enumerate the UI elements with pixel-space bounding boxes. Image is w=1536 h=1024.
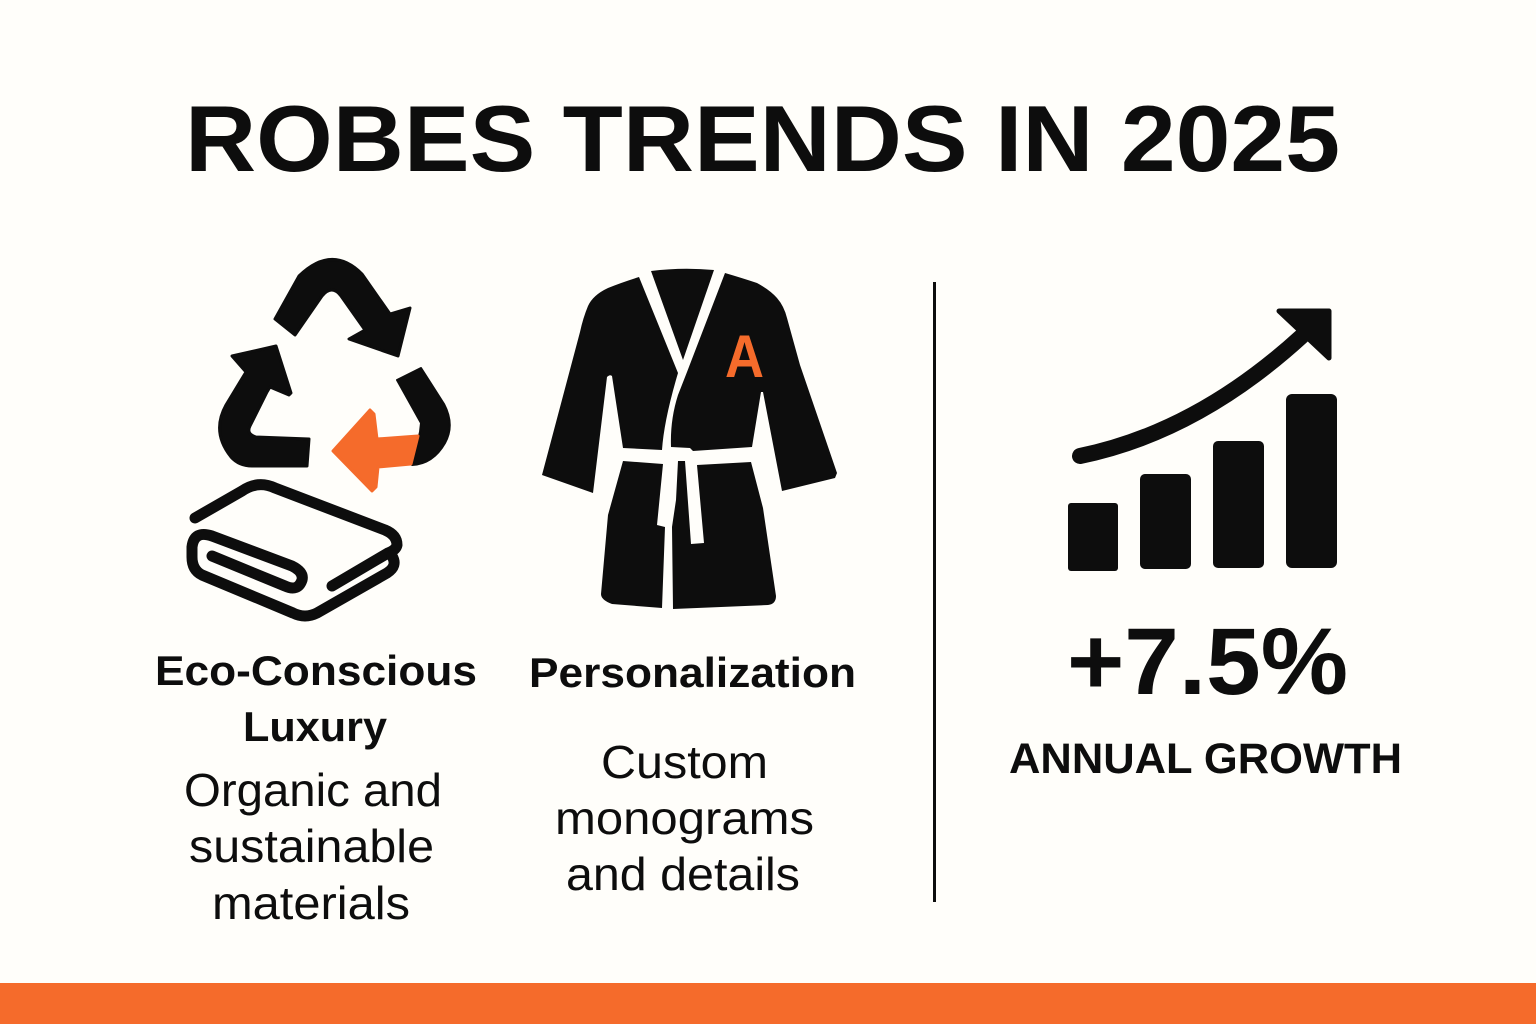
robe right chest and sleeve [671,273,837,491]
top recycling arrow [275,259,410,356]
heading: eco-conscious luxury: Luxury [243,703,388,750]
label: annual growth: ANNUAL GROWTH [1009,735,1402,783]
robe neck [651,269,714,360]
icon: folded towel [192,485,397,616]
text: organic and sustainable materials [184,764,442,929]
icon: robe with monogram [542,269,837,609]
text: organic and sustainable materials: Organic and [184,764,442,816]
heading: eco-conscious luxury: Eco-Conscious [155,647,477,694]
text: custom monograms and details: and details [566,848,800,900]
stat: +7.5%: +7.5% [1067,609,1348,715]
heading: eco-conscious luxury [155,647,477,750]
panel: eco-conscious luxury [155,259,477,929]
robe lower right [672,461,776,609]
panel: personalization [529,269,856,900]
monogram letter A: A [725,323,764,390]
bar 3 [1213,441,1264,568]
robe lower left [601,461,665,608]
text: organic and sustainable materials: materials [212,877,410,929]
title: ROBES TRENDS IN 2025 [185,86,1340,191]
text: organic and sustainable materials: sustainable [189,820,434,872]
divider [933,282,936,902]
heading: personalization: Personalization [529,649,856,696]
footer bar [0,983,1536,1024]
bar 4 [1286,394,1337,568]
orange recycling arrow [333,410,418,491]
robe left chest and sleeve [542,277,678,493]
left recycling arrow [220,346,309,466]
right recycling arrow tail [397,368,450,465]
growth arrow line [1080,336,1302,456]
growth arrow head [1279,311,1329,358]
text: custom monograms and details: Custom [601,736,768,788]
bar 1 [1068,503,1118,571]
panel: annual growth [1009,311,1402,783]
icon: recycling arrows [220,259,450,491]
text: custom monograms and details: monograms [555,792,814,844]
icon: growth bar chart with arrow [1068,311,1337,571]
bar 2 [1140,474,1191,569]
text: custom monograms and details [555,736,814,900]
